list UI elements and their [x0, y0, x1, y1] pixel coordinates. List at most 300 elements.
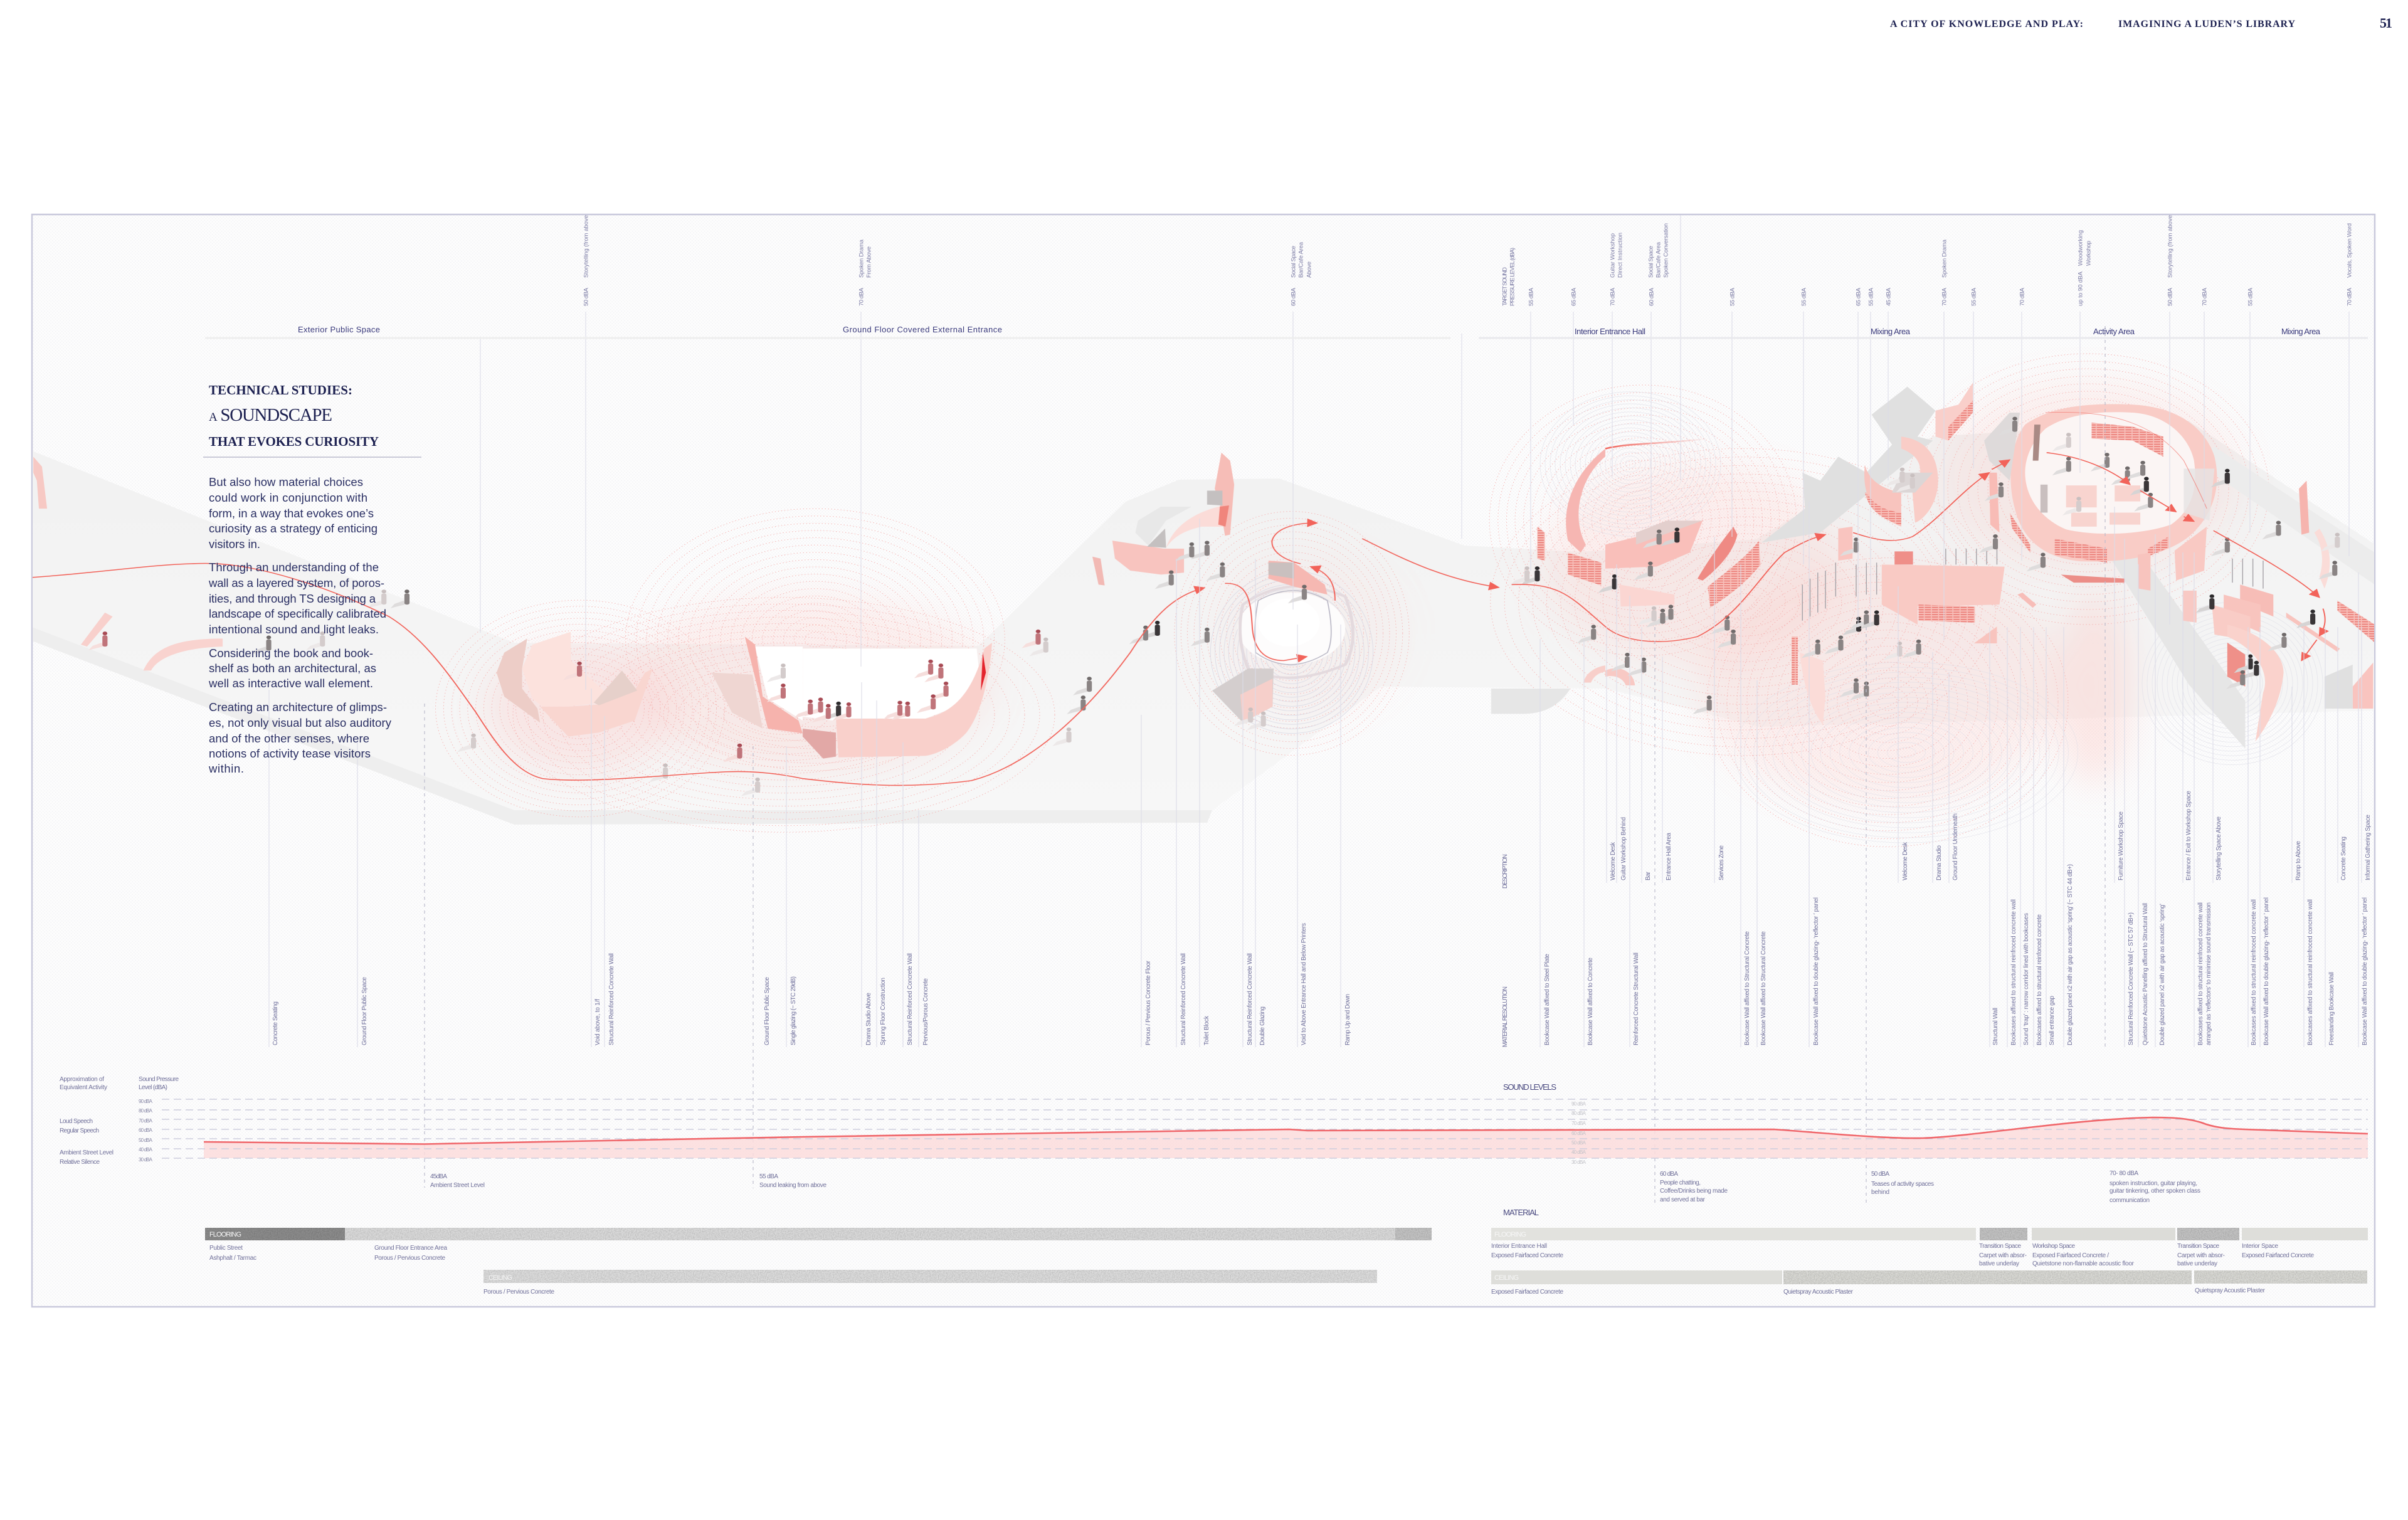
ground plane edge band — [32, 627, 1212, 825]
flooring captions left: Porous / Pervious Concrete — [483, 1289, 554, 1296]
label: 70 and 55 dBA — [2201, 287, 2254, 306]
wall: hall small arc — [1583, 665, 1605, 683]
callout: 60 dBA: People chatting, — [1660, 1180, 1701, 1186]
label: entrance exit: Entrance / Exit to Workshop Space — [2185, 790, 2192, 880]
label: 70 dBA spoken drama: From Above — [865, 246, 873, 278]
label: void above: Void above, to 1/f — [594, 999, 601, 1045]
wall: entrance pier — [1537, 527, 1545, 561]
paragraph two: intentional sound and light leaks. — [209, 623, 379, 636]
material captions right: Transition Space — [1979, 1243, 2021, 1250]
wall: mixing booth left — [1864, 465, 1901, 527]
chart: sound levels — [60, 1076, 2368, 1204]
shadow: cross shaped slab — [1761, 387, 1936, 542]
panel: sound study frame — [32, 214, 2375, 1307]
wall: hall bookcase — [1708, 541, 1760, 608]
label: 70 dBA guitar workshop: 70 dBA — [1609, 287, 1617, 306]
arrow: right mixing curve — [2320, 609, 2325, 636]
label: 60 dBA social conversation — [1648, 223, 1669, 306]
right scale labels: 40 dBA — [1571, 1149, 1587, 1155]
label: 70 dBA spoken drama — [1941, 239, 1948, 306]
flooring bar left — [205, 1228, 1432, 1240]
label: 50 dBA storytelling: Storytelling (from above — [2167, 215, 2173, 278]
label: 60 dBA social conversation: Social Space — [1648, 246, 1654, 278]
material captions right: Quietspray Acoustic Plaster — [1783, 1289, 1854, 1296]
label: services zone: Services Zone — [1718, 845, 1725, 880]
paragraph one: form, in a way that evokes one’s — [209, 507, 374, 520]
header band line right — [1479, 337, 2368, 339]
shadow: wall — [1136, 507, 1191, 546]
callout: 45 dBA: Ambient Street Level — [430, 1182, 485, 1189]
wall: pavilion shade — [594, 670, 637, 705]
label: target sound pressure level: PRESSURE LEVEL (dBA) — [1509, 248, 1516, 306]
pink sound glow — [486, 383, 2239, 803]
material captions right: Carpet with absor- — [2177, 1252, 2225, 1259]
running header: A CITY OF KNOWLEDGE AND PLAY: — [1890, 19, 2083, 29]
paragraph one: visitors in. — [209, 537, 260, 551]
title block — [203, 383, 421, 457]
paragraph one: could work in conjunction with — [209, 491, 367, 504]
label: 70 dBA spoken drama — [858, 239, 873, 306]
label: sprung floor: Sprung Floor Construction — [880, 978, 887, 1045]
wall: void back — [1269, 561, 1328, 594]
label: informal gathering: Informal Gathering Space — [2365, 814, 2372, 880]
wall: lower block pink — [1240, 678, 1272, 722]
wall: mixing big wall — [1882, 564, 2005, 625]
material resolution and description labels — [272, 790, 2372, 1047]
wall: hall arc small — [1605, 668, 1635, 685]
ceiling bar left — [483, 1270, 1377, 1283]
flooring captions left: Porous / Pervious Concrete — [374, 1255, 445, 1262]
chart heading: axis labels: Approximation of — [60, 1076, 104, 1083]
material captions right: Interior Entrance Hall — [1491, 1243, 1547, 1250]
arrow: hall to mixing — [1605, 535, 1825, 641]
target sound pressure labels — [583, 215, 2353, 306]
heading: mixing area: Mixing Area — [1871, 327, 1911, 336]
material heading: MATERIAL — [1503, 1208, 1539, 1217]
arrow: final — [2301, 640, 2317, 660]
label: single glazing: Single glazing (~ STC 29dB) — [790, 976, 797, 1045]
drawing: isometric soundscape plan — [32, 354, 2375, 847]
paragraph two: landscape of specifically calibrated — [209, 607, 386, 620]
wall: pavilion light arc — [522, 632, 615, 707]
label: void to above: Void to Above Entrance Hall and Below Printers — [1301, 923, 1307, 1045]
label: reflectors two lines: Bookcases affixed to structural reinfroced concrete wall — [2197, 902, 2204, 1045]
chart scale labels: 50 dBA — [139, 1137, 153, 1143]
shadow: diagonal band lower — [2112, 557, 2245, 749]
callout: 70-80 dBA — [2110, 1170, 2200, 1204]
figures — [88, 589, 786, 796]
label: 60 dBA social conversation: Spoken Conversation — [1663, 223, 1669, 278]
label: 60 dBA social conversation: 60 dBA — [1648, 287, 1656, 306]
callout: 60 dBA — [1660, 1171, 1728, 1203]
wall: entrance hall upper arc — [1566, 448, 1605, 552]
wall: upper right shelf — [1936, 383, 1973, 441]
stage red edge — [981, 653, 986, 690]
wall: stepped arc three — [2212, 604, 2251, 641]
ring: front bookcase — [2055, 539, 2107, 562]
flooring captions left: Ground Floor Entrance Area — [374, 1245, 447, 1252]
label: 70 and 55 dBA: 70 dBA — [2201, 287, 2209, 306]
label: reflector panel: Bookcase Wall affixed to double glazing- ‘reflector ’ panel — [2362, 897, 2368, 1045]
wall: top-left arc — [33, 457, 47, 509]
ring tables — [2066, 485, 2140, 527]
sound contour rings — [436, 354, 2269, 847]
label: 55 dBA two values: 55 dBA — [1801, 287, 1807, 306]
arrow: void return — [1311, 567, 1335, 601]
chart scale labels: 30 dBA — [139, 1157, 153, 1163]
chart sound level line — [204, 1117, 2368, 1144]
material captions right: Interior Space — [2242, 1243, 2278, 1250]
ring: top bookcase — [2091, 423, 2163, 457]
label: small entrance gap: Small entrance gap — [2049, 995, 2056, 1045]
label: structural wall: Structural Reinforced Concrete Wall — [907, 953, 914, 1045]
paragraph two — [208, 561, 386, 636]
activity ring floor — [2025, 412, 2195, 534]
label: bookcases reinforced: Bookcases affixed to structural reinforced concrete — [2036, 914, 2043, 1045]
label: 55 and 70 dBA: 55 dBA — [1970, 287, 1978, 306]
label: concrete seating: Concrete Seating — [2340, 837, 2347, 880]
running header: IMAGINING A LUDEN’S LIBRARY — [2118, 19, 2295, 29]
label: ground floor underneath: Ground Floor Underneath — [1952, 813, 1959, 880]
label: ramp up and down: Ramp Up and Down — [1344, 994, 1351, 1045]
material captions right: Exposed Fairfaced Concrete / — [2032, 1252, 2109, 1259]
wall: ticket wall — [1112, 541, 1184, 574]
ring: shadow block — [1984, 413, 2020, 480]
paragraph one: curiosity as a strategy of enticing — [209, 522, 378, 535]
paragraph four: es, not only visual but also auditory — [209, 716, 392, 729]
wall: gray return — [1207, 490, 1222, 505]
right scale labels: 50 dBA — [1571, 1140, 1587, 1146]
chart heading: axis labels: Level (dBA) — [139, 1084, 167, 1091]
callout: 50 dBA: Teases of activity spaces — [1871, 1181, 1934, 1188]
label: 55 and 70 dBA — [1970, 287, 2025, 306]
chart heading: axis labels: Sound Pressure — [139, 1076, 179, 1083]
chart heading: axis labels: Equivalent Activity — [60, 1084, 107, 1091]
ceiling bars right — [1491, 1270, 2367, 1284]
wall: gateway pier — [1838, 527, 1852, 561]
title line two: A SOUNDSCAPE — [209, 405, 332, 425]
arrow: void upper loop — [1272, 523, 1317, 564]
callout: 70-80 dBA: spoken instruction, guitar playing, — [2110, 1180, 2197, 1187]
stage shadow — [712, 673, 763, 729]
wall: red box — [1894, 551, 1913, 564]
label: 65 55 45 dBA: 65 dBA — [1855, 287, 1862, 306]
right scale labels: 80 dBA — [1571, 1111, 1587, 1116]
heading: exterior public space: Exterior Public Space — [298, 325, 380, 334]
label: bookcases affixed: Bookcases affixed to structural reinfroced concrete wall — [2010, 899, 2017, 1045]
label: 55 dBA two values — [1729, 287, 1807, 306]
wall: tall fin — [1215, 453, 1234, 536]
wall: small arc — [81, 613, 113, 647]
callout: 60 dBA: Coffee/Drinks being made — [1660, 1188, 1728, 1195]
figures — [1598, 417, 2340, 714]
shadow: hall desk top — [1636, 520, 1703, 545]
chart heading: axis labels: Loud Speech — [60, 1118, 93, 1125]
wall: mixing booth right — [1901, 436, 1938, 522]
heading: interior hall: Interior Entrance Hall — [1575, 327, 1645, 336]
chart scale labels: 90 dBA — [139, 1099, 153, 1104]
arrow: ring upper arc — [2046, 412, 2207, 509]
label: 55 dBA: 55 dBA — [1528, 287, 1535, 306]
label: ramp to above: Ramp to Above — [2295, 840, 2302, 880]
wall: right plane pier — [2183, 591, 2197, 623]
chart heading: axis labels — [60, 1076, 179, 1166]
wall: pavilion dark arc — [497, 638, 540, 722]
wall: red return — [1218, 505, 1229, 527]
label: 60 dBA social space: Bar/Cafe Area — [1298, 241, 1304, 278]
wall: small bench — [2017, 593, 2036, 608]
label: pervious concrete: Pervious/Porous Concrete — [922, 978, 929, 1045]
label: quietstone: Quietstone Acoustic Panelling affixed to Structural Wall — [2142, 903, 2149, 1045]
callout: 70-80 dBA: guitar tinkering, other spoken class — [2110, 1188, 2200, 1195]
label: structural wall: Structural Reinforced Concrete Wall — [1180, 953, 1187, 1045]
label: reflectors two lines — [2197, 902, 2212, 1045]
thick sound line — [1605, 438, 1708, 448]
flooring tag right: FLOORING — [1494, 1231, 1526, 1238]
chart scale labels: 70 dBA — [139, 1118, 153, 1124]
paragraph four: and of the other senses, where — [209, 732, 369, 745]
material captions right: Quietstone non-flamable acoustic floor — [2032, 1260, 2135, 1267]
callout: 50 dBA — [1871, 1171, 1934, 1196]
wall: entrance arc — [1166, 505, 1228, 548]
callout: 45 dBA: 45dBA — [430, 1173, 447, 1180]
label: bookcase structural: Bookcase Wall affixed to Structural Concrete — [1760, 931, 1767, 1045]
label: up to 90 dBA woodworking: Workshop — [2086, 241, 2092, 266]
heading: mixing area right: Mixing Area — [2281, 327, 2321, 336]
label: 60 dBA social space: 60 dBA — [1291, 287, 1297, 306]
sound levels heading: SOUND LEVELS — [1503, 1082, 1556, 1092]
chart scale labels: 80 dBA — [139, 1108, 153, 1114]
wall: front right — [2175, 527, 2207, 581]
label: up to 90 dBA woodworking — [2077, 230, 2092, 306]
right scale labels: 60 dBA — [1571, 1131, 1587, 1136]
arrow: ring entry — [1992, 460, 2010, 470]
right scale labels: 90 dBA — [1571, 1101, 1587, 1107]
label: concrete seating: Concrete Seating — [272, 1001, 279, 1045]
guide lines to upper labels — [480, 215, 2349, 690]
arrow: void descent — [1225, 583, 1307, 660]
wall: curved bench — [144, 638, 223, 670]
heading: activity area: Activity Area — [2093, 327, 2135, 336]
ring: right bookcase — [2148, 537, 2168, 557]
chart scale labels: 40 dBA — [139, 1147, 153, 1153]
paragraph two: Through an understanding of the — [209, 561, 379, 574]
label: up to 90 dBA woodworking: Woodworking — [2077, 230, 2084, 266]
wall: shelf detail — [1948, 401, 1973, 441]
paragraph one — [209, 475, 378, 551]
label: bar: Bar — [1645, 871, 1652, 880]
wall: booth shelf — [1865, 493, 1901, 525]
label: structural wall: Structural Reinforced Concrete Wall — [608, 953, 615, 1045]
ring: shelf dark post — [2033, 425, 2041, 461]
label: 70 dBA guitar workshop — [1609, 233, 1624, 306]
chart scale labels: 60 dBA — [139, 1127, 153, 1133]
label: porous floor: Porous / Pervious Concrete Floor — [1145, 960, 1152, 1045]
arrow: entrance hall path — [1512, 584, 1605, 626]
wall: mixing bookcase — [1919, 604, 1975, 623]
label: double glazed stc 44: Double glazed panel x2 with air gap as acoustic ‘spring’ (~ STC 44 dB+) — [2067, 864, 2074, 1045]
callout: 70-80 dBA: communication — [2110, 1197, 2150, 1204]
dashed section lines — [425, 326, 2105, 1204]
material captions right: Exposed Fairfaced Concrete — [1491, 1289, 1563, 1296]
section one: exterior walls and pavilion — [32, 457, 803, 796]
label: up to 90 dBA woodworking: up to 90 dBA — [2077, 271, 2084, 306]
stage interior white — [755, 647, 803, 720]
arrow: visitor path exterior — [32, 563, 803, 780]
shadow: right end — [2325, 665, 2353, 709]
wall: lower block shade — [1212, 668, 1274, 722]
stage corner dark — [803, 729, 836, 759]
title rule — [203, 457, 421, 458]
callout: 50 dBA: 50 dBA — [1871, 1171, 1889, 1178]
chart scale labels — [139, 1099, 153, 1163]
callout: 55 dBA: Sound leaking from above — [759, 1182, 826, 1189]
label: material resolution: MATERIAL RESOLUTION — [1502, 986, 1509, 1047]
ring: shelves grey — [2041, 485, 2047, 512]
label: structural wall: Structural Wall — [1992, 1008, 1999, 1045]
label: double glazed spring: Double glazed panel x2 with air gap as acoustic ‘spring’ — [2159, 904, 2166, 1045]
label: target sound pressure level — [1501, 248, 1516, 306]
ring: glass right — [2184, 468, 2214, 520]
label: structural stc 57: Structural Reinforced Concrete Wall (~ STC 57 dB+) — [2128, 912, 2135, 1045]
running header — [1890, 15, 2392, 31]
label: 50 dBA storytelling — [2167, 215, 2173, 306]
label: 65 55 45 dBA — [1855, 287, 1893, 306]
paragraph one: But also how material choices — [209, 475, 363, 488]
ceiling tag right: CEILING — [1494, 1274, 1519, 1282]
arrow: visitor path up ramp — [803, 588, 1205, 786]
label: 50 dBA storytelling — [583, 215, 589, 306]
material strip — [205, 1208, 2368, 1296]
heading: ground floor: Ground Floor Covered External Entrance — [843, 325, 1002, 334]
wall: right end — [2353, 663, 2373, 709]
wall: large arc — [2227, 625, 2284, 741]
paragraph three: Considering the book and book- — [209, 647, 373, 660]
label: furniture workshop: Furniture Workshop Space — [2118, 811, 2125, 880]
wall: lower red shelf — [1792, 636, 1798, 685]
grey ceiling contour rings — [1210, 392, 2323, 843]
void walls rings — [1255, 591, 1331, 665]
label: 65 55 45 dBA: 45 dBA — [1885, 287, 1893, 306]
label: welcome desk: Welcome Desk — [1902, 842, 1909, 880]
label: drama studio: Drama Studio — [1936, 845, 1943, 880]
wall: entrance hall front shelf — [1568, 552, 1601, 586]
wall: stepped arc two — [2224, 594, 2261, 633]
label: 70 dBA spoken drama: Spoken Drama — [858, 239, 865, 278]
label: 55 dBA two values: 55 dBA — [1729, 287, 1736, 306]
section three: interior hall, mixing and activity areas — [1598, 383, 2375, 749]
wall: gray block — [1147, 529, 1166, 548]
label: double glazing: Double Glazing — [1259, 1006, 1266, 1045]
paragraph four — [208, 700, 392, 775]
paragraph four: notions of activity tease visitors — [209, 747, 371, 760]
label: ground floor public space: Ground Floor Public Space — [764, 976, 771, 1045]
label: reflectors two lines: arranged as ‘reflectors’ to minimise sound transmission — [2205, 902, 2212, 1045]
paragraph two: wall as a layered system, of poros- — [208, 576, 384, 589]
callout: 45 dBA — [430, 1173, 485, 1189]
shadow: diagonal band right — [2194, 446, 2375, 584]
label: welcome desk: Welcome Desk — [1610, 842, 1617, 880]
label: drama studio above: Drama Studio Above — [865, 992, 872, 1045]
header band line left — [205, 337, 1450, 339]
right scale labels: 70 dBA — [1571, 1121, 1587, 1126]
label: 70 dBA spoken drama: 70 dBA — [858, 287, 865, 306]
material captions right: Exposed Fairfaced Concrete — [2242, 1252, 2314, 1259]
wall: triangle panel — [1974, 626, 1997, 643]
label: 60 dBA social space: Social Space — [1291, 246, 1297, 278]
arrow: mixing to ring — [1853, 473, 1989, 541]
paragraph four: Creating an architecture of glimps- — [209, 700, 387, 714]
figures — [794, 541, 1596, 746]
label: 50 dBA storytelling: Storytelling (from above — [583, 215, 589, 278]
material captions right — [1491, 1243, 2314, 1296]
label: bookcases affixed: Bookcases affixed to structural reinfroced concrete wall — [2251, 899, 2258, 1045]
wall: bench long — [2286, 613, 2340, 652]
label: storytelling space: Storytelling Space Above — [2215, 816, 2222, 880]
right scale labels — [1571, 1101, 1587, 1165]
label: bookcase steel plate: Bookcase Wall affixed to Steel Plate — [1544, 953, 1551, 1045]
void inner white — [1259, 599, 1319, 647]
callout: 60 dBA: 60 dBA — [1660, 1171, 1678, 1178]
label: 65 dBA: 65 dBA — [1570, 287, 1578, 306]
arrow: ring to right mixing — [2214, 530, 2320, 598]
label: ground floor public space: Ground Floor Public Space — [361, 976, 368, 1045]
wall: hall curved deep red — [1698, 527, 1738, 581]
title line one: TECHNICAL STUDIES: — [209, 383, 352, 398]
chart heading: axis labels: Relative Silence — [60, 1159, 100, 1166]
running header: 51 — [2380, 15, 2392, 31]
section two: stage, ramp and circular void — [794, 448, 1605, 786]
stage end wall — [745, 636, 803, 734]
material captions right: Quietspray Acoustic Plaster — [2195, 1287, 2266, 1294]
material captions right: bative underlay — [2177, 1260, 2217, 1267]
arrow: ring interior — [2047, 453, 2130, 485]
label: bookcase concrete: Bookcase Wall affixed to Concrete — [1587, 957, 1594, 1045]
wall: lower curved — [1800, 653, 1825, 725]
flooring captions left: Public Street — [209, 1245, 243, 1252]
flooring captions left — [209, 1245, 554, 1296]
callout: 70-80 dBA: 70- 80 dBA — [2110, 1170, 2138, 1177]
label: 70 dBA vocals — [2347, 223, 2353, 306]
chart area fill — [204, 1117, 2368, 1158]
callout: 50 dBA: behind — [1871, 1189, 1889, 1196]
arrow: ring exit one — [2140, 490, 2176, 512]
ring: outer left wall — [1989, 473, 2000, 532]
stage interior white — [803, 648, 980, 720]
callout: 55 dBA: 55 dBA — [759, 1173, 778, 1180]
paragraph three: shelf as both an architectural, as — [209, 662, 376, 675]
guide lines to lower labels — [269, 502, 2362, 1047]
title line three: THAT EVOKES CURIOSITY — [209, 434, 379, 449]
label: description: DESCRIPTION — [1502, 854, 1509, 889]
wall: red inner — [2227, 643, 2245, 687]
label: bookcases affixed: Bookcases affixed to structural reinfroced concrete wall — [2307, 899, 2314, 1045]
wall: stepped arc one — [2240, 584, 2273, 616]
paragraph two: ities, and through TS designing a — [209, 592, 376, 605]
label: 70 dBA vocals: Vocals, Spoken Word — [2347, 223, 2353, 278]
paragraph three: well as interactive wall element. — [208, 677, 373, 690]
flooring captions left: Ashphalt / Tarmac — [209, 1255, 256, 1262]
label: 60 dBA social space — [1291, 241, 1313, 306]
wall: front pier — [2138, 552, 2150, 591]
label: 70 dBA guitar workshop: Direct Instruction — [1617, 233, 1624, 278]
label: 70 dBA spoken drama: Spoken Drama — [1941, 239, 1948, 278]
label: reflector panel: Bookcase Wall affixed to double glazing- ‘reflector ’ panel — [1813, 897, 1820, 1045]
material captions right: Workshop Space — [2032, 1243, 2075, 1250]
label: 60 dBA social conversation: Bar/Cafe Area — [1656, 241, 1662, 278]
wall: hall lower platform — [1620, 584, 1674, 606]
label: freestanding bookcase: Freestanding Bookcase Wall — [2328, 972, 2335, 1045]
